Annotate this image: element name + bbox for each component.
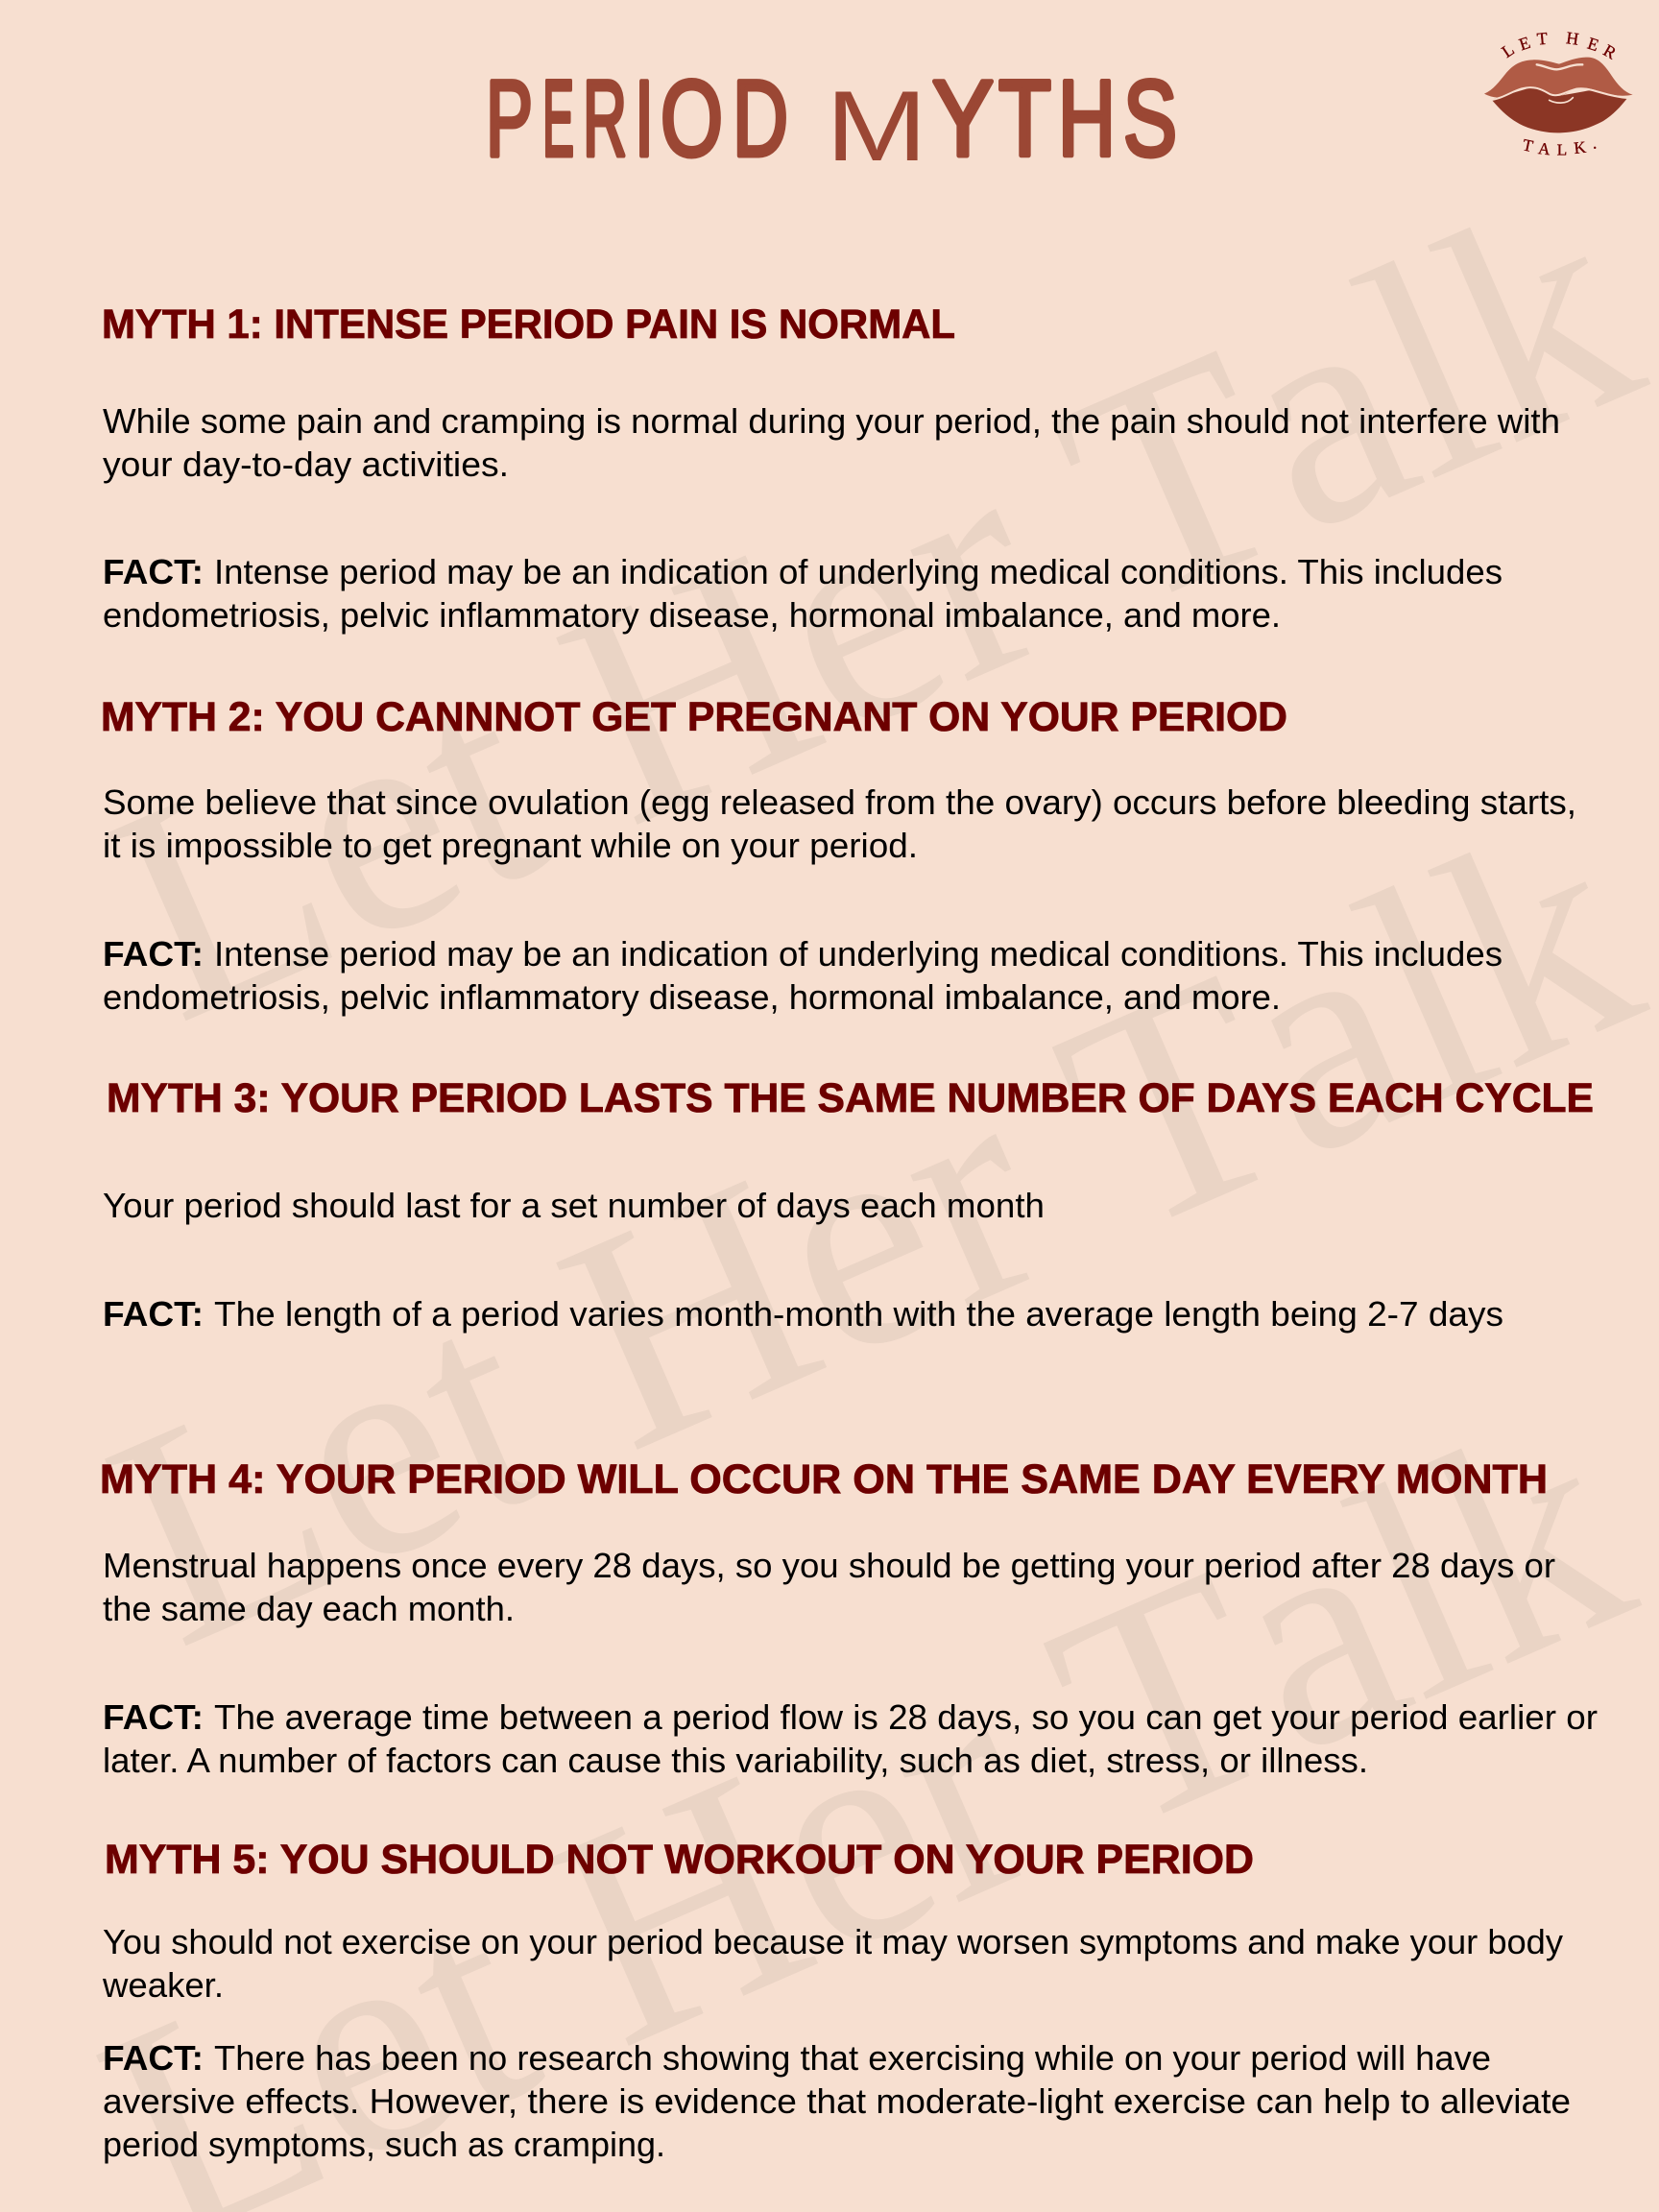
title: Y	[932, 59, 994, 179]
title: E	[542, 59, 574, 179]
myth 4 heading: MYTH 4: YOUR PERIOD WILL OCCUR ON THE SAME DAY EVERY MONTH	[100, 1457, 1548, 1503]
myth 1 fact: FACT:	[103, 552, 204, 591]
panel: myth 2	[101, 695, 1576, 1017]
title: T	[998, 59, 1051, 179]
logo lip line	[1491, 87, 1627, 100]
myth 5 fact: FACT:	[103, 2038, 204, 2078]
myth 2 fact: FACT:	[103, 934, 204, 974]
myth 1 description: your day-to-day activities.	[103, 445, 509, 484]
myth 4 fact: FACT:	[103, 1697, 204, 1737]
myth 5 description: You should not exercise on your period because it may worsen symptoms and make your body	[103, 1922, 1563, 1961]
myth 1 fact: Intense period may be an indication of underlying medical conditions. This includes	[214, 552, 1503, 591]
myth 3 heading: MYTH 3: YOUR PERIOD LASTS THE SAME NUMBER OF DAYS EACH CYCLE	[107, 1076, 1594, 1121]
title: R	[583, 59, 627, 179]
logo: Let Her Talk lips	[1484, 27, 1633, 159]
logo text bottom: TALK·	[1521, 135, 1599, 159]
myth 1 heading: MYTH 1: INTENSE PERIOD PAIN IS NORMAL	[102, 302, 955, 348]
myth 1 fact: endometriosis, pelvic inflammatory disease, hormonal imbalance, and more.	[103, 595, 1281, 635]
title: S	[1123, 59, 1177, 179]
myth 2 fact: Intense period may be an indication of underlying medical conditions. This includes	[214, 934, 1503, 974]
watermark 2: Let Her Talk	[67, 756, 1659, 1712]
myth 3 fact: The length of a period varies month-month with the average length being 2-7 days	[214, 1294, 1503, 1334]
watermark 1: Let Her Talk	[67, 131, 1659, 1087]
logo lower highlight	[1550, 98, 1573, 103]
myth 5 description: weaker.	[102, 1965, 224, 2005]
myth 4 fact: The average time between a period flow is 28 days, so you can get your period earlier or	[214, 1697, 1598, 1737]
title: P	[486, 59, 533, 179]
myth 3 description: Your period should last for a set number of days each month	[103, 1186, 1045, 1225]
myth 5 fact: period symptoms, such as cramping.	[103, 2125, 665, 2164]
myth 5 fact: There has been no research showing that exercising while on your period will have	[214, 2038, 1491, 2078]
myth 1 description: While some pain and cramping is normal during your period, the pain should not interfere with	[103, 401, 1560, 441]
title: M	[826, 71, 927, 182]
panel: myth 5	[102, 1838, 1571, 2164]
myth 2 fact: endometriosis, pelvic inflammatory disease, hormonal imbalance, and more.	[103, 977, 1281, 1017]
panel: myth 1	[102, 302, 1560, 635]
logo upper lip	[1484, 58, 1633, 97]
myth 5 fact: aversive effects. However, there is evidence that moderate-light exercise can help to alleviate	[103, 2081, 1571, 2121]
title: O	[661, 59, 723, 179]
myth 2 heading: MYTH 2: YOU CANNNOT GET PREGNANT ON YOUR PERIOD	[101, 695, 1287, 740]
logo lower lip	[1491, 87, 1627, 132]
title: I	[635, 59, 654, 179]
myth 4 fact: later. A number of factors can cause this variability, such as diet, stress, or illness.	[103, 1741, 1368, 1780]
myth 5 heading: MYTH 5: YOU SHOULD NOT WORKOUT ON YOUR PERIOD	[105, 1838, 1254, 1883]
panel: myth 4	[100, 1457, 1598, 1780]
title: H	[1058, 59, 1116, 179]
panel: myth 3	[103, 1076, 1594, 1334]
logo text top: LET HER	[1498, 27, 1620, 62]
title: D	[733, 59, 788, 179]
myth 2 description: Some believe that since ovulation (egg released from the ovary) occurs before bleeding starts,	[103, 782, 1576, 822]
myth 4 description: Menstrual happens once every 28 days, so you should be getting your period after 28 days or	[103, 1546, 1555, 1585]
logo upper highlight	[1537, 64, 1582, 69]
myth 3 fact: FACT:	[103, 1294, 204, 1334]
myth 4 description: the same day each month.	[103, 1589, 515, 1628]
myth 2 description: it is impossible to get pregnant while on your period.	[103, 826, 918, 865]
